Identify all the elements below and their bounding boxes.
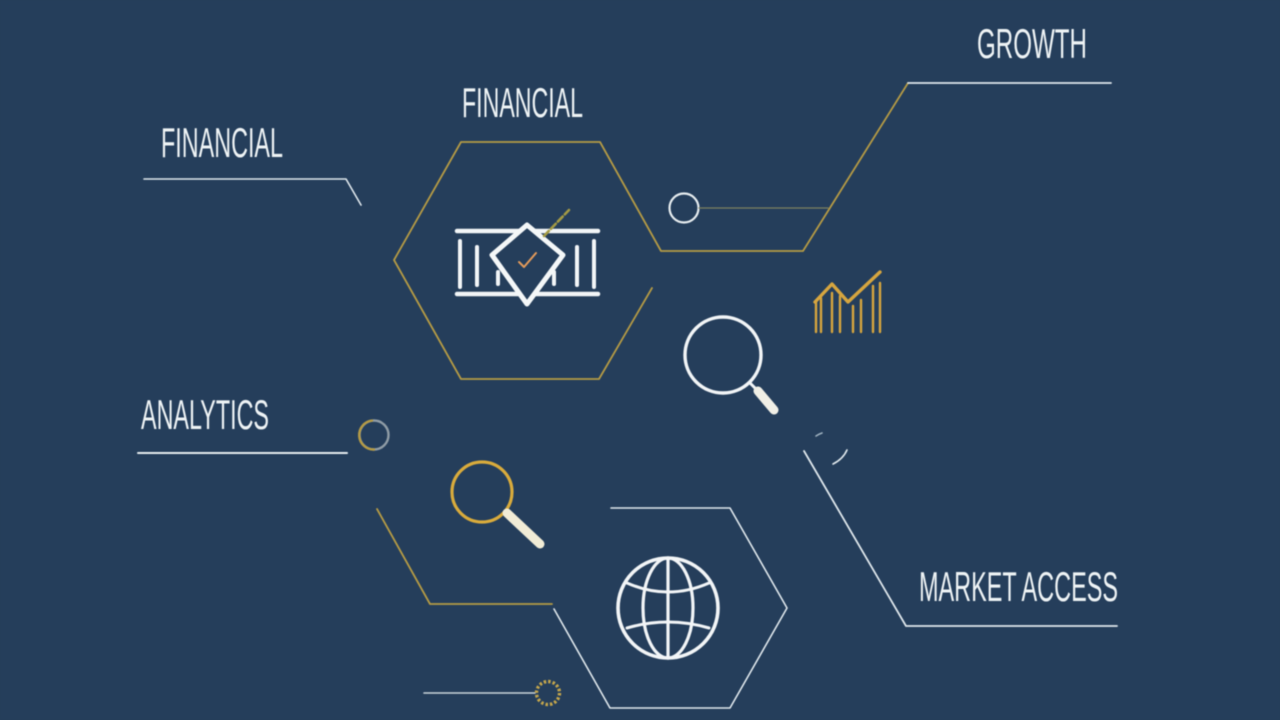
connector: analytics node [359,420,388,450]
connector: growth node [670,194,828,222]
connector: bottom leader [424,692,535,694]
icon: diamond [492,225,563,304]
connector: market access leader [804,451,1117,626]
icon: bar chart growth [815,272,880,332]
icon: pen stroke [544,210,569,236]
icon: gold magnifier [452,462,540,544]
heading: market access: MARKET ACCESS [919,563,1118,610]
connector: lower gold path [377,509,552,604]
panel: market access hexagon [554,508,787,708]
icon: chart trend line [815,272,880,302]
connector: analytics leader [138,452,347,454]
connector: growth leader [908,82,1111,84]
icon: document with diamond check [457,210,598,304]
heading: financial left: FINANCIAL [161,119,283,166]
decorative arc fragments [816,433,847,464]
icon: check mark [519,253,536,267]
icon: large magnifier [685,317,774,410]
heading: analytics: ANALYTICS [141,391,269,438]
icon: ledger rails [457,231,598,294]
panel: financial hexagon [394,83,908,379]
heading: financial centre: FINANCIAL [462,79,583,126]
connector: financial left leader [144,179,361,205]
icon: chart bars [816,283,880,332]
connector: dotted node [536,682,560,704]
icon: globe [618,558,718,658]
heading: growth: GROWTH [977,20,1087,67]
